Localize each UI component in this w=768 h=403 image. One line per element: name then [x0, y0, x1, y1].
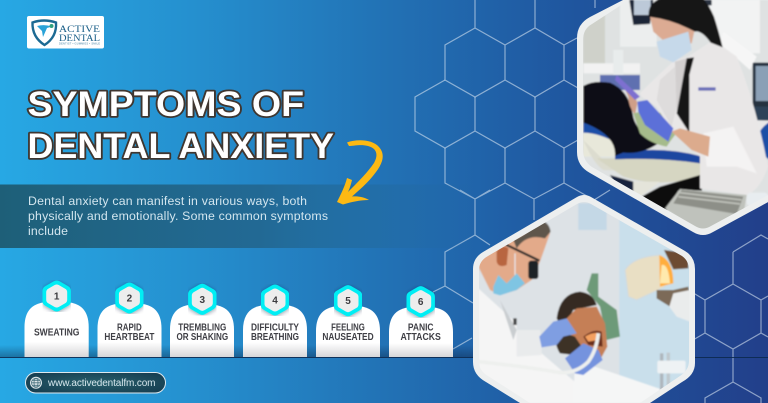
symptom card 4: difficulty breathing: BREATHING	[251, 332, 299, 343]
description band	[0, 184, 475, 248]
logo: DENTIST • GUMMIES • SMILE	[59, 42, 100, 46]
symptom card 3: trembling or shaking	[170, 289, 234, 357]
icon: yellow hand-drawn arrow	[337, 140, 383, 204]
symptom card 3: trembling or shaking: OR SHAKING	[176, 332, 228, 343]
symptom card 4: difficulty breathing	[243, 290, 307, 357]
symptom card 4: difficulty breathing: 4	[272, 296, 278, 306]
description text: physically and emotionally. Some common symptoms	[28, 209, 328, 223]
description text: Dental anxiety can manifest in various ways, both	[28, 194, 307, 208]
symptom card 6: panic attacks: 6	[418, 297, 424, 308]
hexagon line pattern	[415, 0, 768, 403]
symptom card 1: sweating	[24, 286, 89, 357]
symptom card 5: feeling nauseated: NAUSEATED	[322, 332, 374, 343]
logo	[27, 16, 104, 48]
symptom card 5: feeling nauseated	[316, 291, 380, 357]
title	[28, 85, 334, 166]
symptom card 4: difficulty breathing: DIFFICULTY	[251, 322, 299, 334]
symptom card 3: trembling or shaking: TREMBLING	[178, 322, 226, 334]
symptom card 2: rapid heartbeat: RAPID	[117, 322, 142, 334]
title: SYMPTOMS OF	[28, 85, 304, 124]
description text: include	[28, 224, 68, 238]
logo: DENTAL	[59, 34, 100, 44]
symptom card 2: rapid heartbeat: 2	[127, 294, 133, 304]
photo: dentist treating male patient	[470, 195, 697, 403]
symptom card 1: sweating: 1	[54, 292, 60, 302]
symptom card 6: panic attacks: ATTACKS	[401, 332, 441, 343]
description text	[28, 194, 328, 238]
website pill: www.activedentalfm.com	[47, 378, 156, 389]
symptom card 6: panic attacks	[389, 292, 453, 357]
title: DENTAL ANXIETY	[28, 127, 334, 166]
icon: globe	[30, 377, 42, 389]
logo: ACTIVE	[59, 25, 100, 35]
symptom card 1: sweating: SWEATING	[34, 328, 80, 338]
photo: dentist with female patient	[577, 0, 768, 240]
symptom card 5: feeling nauseated: FEELING	[331, 322, 365, 334]
symptom card 2: rapid heartbeat	[98, 288, 162, 357]
symptom card 3: trembling or shaking: 3	[200, 295, 206, 306]
website pill	[26, 372, 166, 393]
icon: logo shield	[32, 20, 56, 45]
symptom card 6: panic attacks: PANIC	[408, 322, 434, 334]
symptom card 2: rapid heartbeat: HEARTBEAT	[104, 332, 154, 343]
symptom card 5: feeling nauseated: 5	[345, 296, 351, 307]
shelf shadow and line	[0, 346, 768, 358]
